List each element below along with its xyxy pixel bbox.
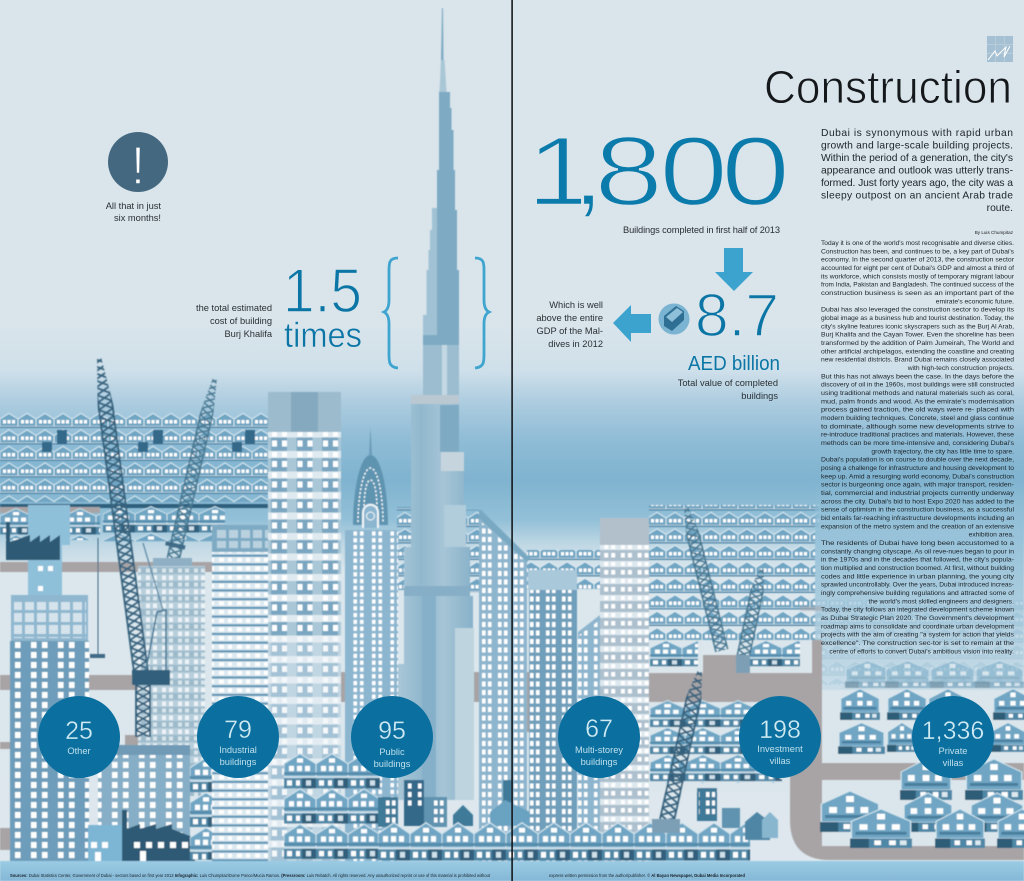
faded terraces upper right (845, 661, 1024, 688)
article paragraph 5 (821, 540, 1015, 605)
section icon (987, 36, 1013, 62)
building: low block (98, 745, 190, 861)
article paragraph 6 (821, 607, 1015, 655)
roads (0, 562, 1024, 860)
building: grey-capped (600, 518, 649, 861)
alert caption (106, 201, 161, 223)
right brace (475, 258, 489, 368)
article paragraph 3: using traditional methods and natural materials such as coral, (821, 390, 1014, 397)
alert caption: All that in just (106, 201, 161, 211)
article paragraph 6: excellence". The construction sec-tor is set to remain at the (821, 640, 1014, 647)
article paragraph 4: bid entails far-reaching infrastructure developments including an (821, 515, 1014, 522)
terraced houses: lower left (190, 753, 380, 860)
article intro: growth and large-scale building projects. (821, 140, 1013, 152)
faded houses behind article (800, 600, 1024, 685)
article paragraph 2: city's skyline features iconic skyscrapers such as the Burj Al Arab, (821, 323, 1014, 330)
Burj Khalifa tower (398, 8, 474, 800)
article paragraph 2: Burj Khalifa and the Cayan Tower. Even the shoreline has been (821, 332, 1014, 339)
stat circle: public buildings: Public (379, 747, 405, 757)
building: tall capped (268, 392, 341, 861)
caption: total value: buildings (741, 391, 778, 401)
article paragraph 6: centre of efforts to convert Dubai's ambitious vision into reality. (829, 648, 1014, 655)
stat circle: investment villas: villas (770, 756, 791, 766)
factory: front (122, 810, 195, 862)
article paragraph 2: new residential districts. Brand Dubai remains closely associated (821, 357, 1014, 364)
caption: Maldives GDP: GDP of the Mal- (537, 326, 603, 336)
building: art deco tower (345, 427, 398, 861)
article intro (821, 128, 1013, 214)
stat circle: multi-storey buildings (558, 696, 640, 778)
caption: Maldives GDP (536, 300, 603, 349)
article paragraph 3: modern building techniques. Concrete, steel and glass continue (821, 415, 1014, 422)
building: striped (212, 525, 282, 861)
caption: Burj Khalifa cost: the total estimated (196, 303, 272, 313)
unit: AED billion: AED billion (688, 353, 780, 375)
footer source right: express written permission from the author/publisher. © Al Bayan Newspaper, Dubai Media Incorporated (549, 872, 745, 878)
stat: 1.5 times (283, 257, 362, 355)
stat: 1.5 times: times (284, 316, 362, 355)
article intro: Within the period of a generation, the city's (821, 153, 1013, 164)
article paragraph 6: Today, the city follows an integrated development scheme known (821, 607, 1014, 614)
alert icon: ! (130, 136, 146, 196)
article intro: formed. Just forty years ago, the city was a (821, 178, 1013, 189)
article paragraph 2: other artificial archipelagos, extending the coastline and creating (821, 348, 1014, 355)
article intro: sleepy outpost on an ancient Arab trade (821, 190, 1013, 202)
article paragraph 4: sense of optimism in the construction business, as a successful (821, 507, 1015, 514)
stat circle: private villas: villas (943, 758, 964, 768)
caption: total value: Total value of completed (678, 378, 778, 388)
article paragraph 5: The residents of Dubai have long been accustomed to a (821, 540, 1014, 547)
article paragraph 5: tion multiplied and construction boomed. At first, without building (821, 565, 1014, 572)
building: stepped pale tower (22, 505, 70, 600)
building: pale crane-side tower (138, 558, 205, 796)
article paragraph 1: accounted for eight per cent of Dubai's GDP and almost a third of (821, 265, 1014, 272)
stat circle: investment villas (739, 696, 821, 778)
article paragraph 5: sprawled uncontrollably. Over the years, Dubai introduced increas- (821, 582, 1014, 589)
stat circle: other: 25 (65, 717, 93, 745)
article paragraph 1: its workforce, which consists mostly of temporary migrant labour (821, 273, 1015, 280)
small terraces above road (650, 640, 812, 673)
article paragraph 1: emirate's economic future. (936, 298, 1014, 305)
stat circle: multi-storey buildings: 67 (585, 715, 613, 743)
article paragraph 3: mud, palm fronds and wood. As the emirate's modernisation (821, 398, 1014, 405)
article paragraph 2: with high-tech construction projects. (907, 365, 1014, 372)
terraced houses: middle right (650, 700, 782, 783)
article paragraph 1: construction business is seen as an important part of the (821, 290, 1014, 297)
stat circle: other (38, 696, 120, 778)
crane: main left (90, 356, 170, 737)
alert icon (108, 132, 168, 196)
stat circle: investment villas: Investment (757, 744, 803, 754)
alert caption: six months! (114, 213, 161, 223)
house field: back left (0, 412, 270, 541)
stat circle: industrial buildings: 79 (224, 716, 252, 744)
article paragraph 3: methods can be more time-intensive and, considering Dubai's (821, 440, 1015, 447)
stat circle: investment villas: 198 (759, 716, 801, 744)
crane: back left (162, 376, 224, 561)
caption: Maldives GDP: dives in 2012 (548, 339, 603, 349)
article paragraph 4: posing a challenge for infrastructure and housing development to (821, 465, 1014, 472)
left brace (384, 258, 398, 368)
crane: right short (736, 567, 769, 673)
title: Construction (764, 61, 1012, 113)
footer source left: Sources: Dubai Statistics Center, Government of Dubai - sectors based on first year 2013 Infographic: Luis Chumpitaz/Dome Ponce/Mucia Ramos. (Pressroom: Luis Rebatch. All rights reserved. Any unauthorized reprint or use of this material is prohibited without (10, 873, 491, 878)
sky wash behind article (815, 470, 1024, 690)
article paragraph 1: Construction has been, and continues to be, a key part of Dubai's (821, 248, 1015, 255)
article paragraph 1: economy. In the second quarter of 2013, the construction sector (821, 257, 1015, 264)
stat circle: industrial buildings (197, 696, 279, 778)
caption: total value (678, 378, 778, 401)
detached villas: lower right (820, 759, 1024, 848)
caption: Burj Khalifa cost: cost of building (210, 316, 272, 326)
caption: buildings completed: Buildings completed in first half of 2013 (623, 225, 780, 235)
article paragraph 3: But this has not always been the case. In the days before the (821, 373, 1014, 380)
crane: lower right (652, 668, 708, 833)
stat circle: private villas (912, 696, 994, 778)
stat circle: multi-storey buildings: Multi-storey (575, 745, 623, 755)
caption: Burj Khalifa cost: Burj Khalifa (224, 329, 273, 339)
stat circle: public buildings: buildings (374, 759, 411, 769)
stat: 8.7: 8.7 (695, 282, 779, 349)
article paragraph 1: Today it is one of the world's most recognisable and diverse cities. (821, 240, 1014, 247)
article paragraph 4: expansion of the metro system and the creation of an extensive (821, 523, 1014, 530)
article paragraph 2: transformed by the addition of Palm Jumeirah, The World and (821, 340, 1014, 347)
article intro: route. (987, 203, 1013, 214)
article paragraph 3: growth trajectory, the city has little time to spare. (871, 448, 1014, 455)
lower-right plots (650, 690, 1024, 846)
article paragraph 5: constantly changing cityscape. As oil reve-nues began to pour in (821, 548, 1014, 555)
building: slanted (479, 510, 530, 861)
icon: banknotes (658, 304, 690, 334)
article paragraph 4: sector is burgeoning once again, with major transport, residen- (821, 482, 1014, 489)
caption: Burj Khalifa cost (196, 303, 273, 339)
article paragraph 2 (821, 307, 1015, 372)
article paragraph 4 (821, 457, 1015, 539)
small dark blocks near tower (378, 780, 530, 827)
article paragraph 5: codes and little experience in urban planning, the young city (821, 573, 1015, 580)
building: light-blue house (88, 825, 124, 862)
stat: 1,800: 1,800 (526, 117, 790, 226)
building: multi-storey right (528, 570, 577, 861)
stat circle: private villas: Private (939, 746, 967, 756)
article paragraph 1: from India, Pakistan and Bangladesh. The continued success of the (821, 282, 1014, 289)
article intro: appearance and outlook was utterly trans- (821, 166, 1013, 176)
stat circle: public buildings: 95 (378, 717, 406, 745)
caption: Maldives GDP: above the entire (536, 313, 603, 323)
stat circle: industrial buildings: Industrial (219, 745, 257, 755)
article paragraph 5: ingly comprehensive building regulations and attracted some of (821, 590, 1014, 597)
factory: small back (6, 522, 60, 560)
arrow: left (613, 305, 651, 342)
center divider (511, 0, 513, 881)
caption: Maldives GDP: Which is well (549, 300, 603, 310)
article paragraph 3: to dominate, although some new developments strive to (821, 423, 1014, 430)
bottom strip (0, 861, 1024, 881)
small blocks lower right (697, 788, 778, 840)
article paragraph 4: exhibition area. (969, 532, 1014, 539)
building: slanted small (578, 615, 600, 861)
house field: back right (527, 505, 819, 640)
house field: behind tower (397, 507, 481, 592)
article paragraph 6: roadmap aims to consolidate and coordinate urban development (821, 623, 1014, 630)
stat: 1.5 times: 1.5 (283, 257, 362, 326)
article paragraph 4: tial, commercial and industrial projects currently underway (821, 490, 1015, 497)
article paragraph 5: the world's most skilled engineers and designers. (868, 598, 1014, 605)
building: leftmost (10, 595, 89, 861)
stat circle: private villas: 1,336 (922, 717, 984, 745)
stat circle: public buildings (351, 696, 433, 778)
stat circle: multi-storey buildings: buildings (581, 757, 618, 767)
article intro: Dubai is synonymous with rapid urban (821, 128, 1013, 139)
article paragraph 2: Dubai has also leveraged the construction sector to develop its (821, 307, 1015, 314)
terraced houses: bottom row (378, 822, 750, 861)
arrow: down (715, 248, 753, 291)
stat circle: industrial buildings: buildings (220, 757, 257, 767)
article paragraph 4: keep up. Amid a resurging world economy, Dubai's construction (821, 473, 1014, 480)
article paragraph 1 (821, 240, 1015, 305)
article paragraph 3: discovery of oil in the 1960s, most buildings were still constructed (821, 382, 1014, 389)
crane: right tall (679, 505, 729, 652)
byline: By Luis Chumpitaz (975, 230, 1014, 235)
article paragraph 6: as Dubai Strategic Plan 2020. The Government's development (821, 615, 1014, 622)
stat circle: other: Other (67, 746, 91, 756)
article paragraph 2: global image as a business hub and tourist destination. Today, the (821, 315, 1014, 322)
article paragraph 3 (821, 373, 1015, 455)
article paragraph 6: projects with the aim of creating "a system for action that yields (821, 632, 1015, 639)
article paragraph 4: across the city. Dubai's bid to host Expo 2020 has added to the (821, 498, 1014, 505)
article paragraph 4: Dubai's population is on course to double over the next decade, (821, 457, 1014, 464)
article paragraph 5: in the 1970s and in the decades that followed, the city's popula- (821, 557, 1014, 564)
terraced houses: upper plots (838, 689, 1024, 754)
article paragraph 3: re-introduce traditional practices and materials. However, these (821, 432, 1014, 439)
article paragraph 3: process gained traction, the old ways were re- placed with (821, 407, 1014, 414)
